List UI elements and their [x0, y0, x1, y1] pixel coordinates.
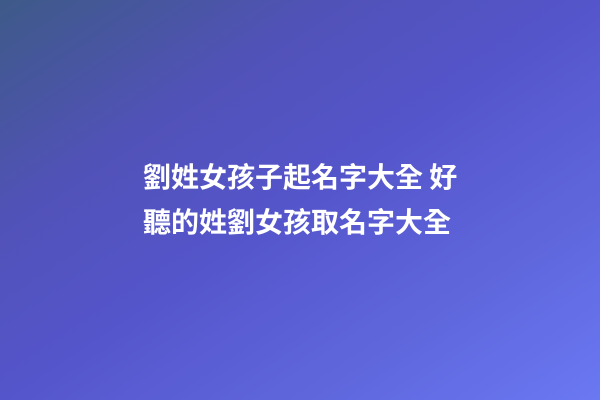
title: 聽的姓劉女孩取名字大全: [143, 207, 451, 238]
title: [143, 162, 457, 238]
title: 劉姓女孩子起名字大全 好: [143, 162, 457, 193]
